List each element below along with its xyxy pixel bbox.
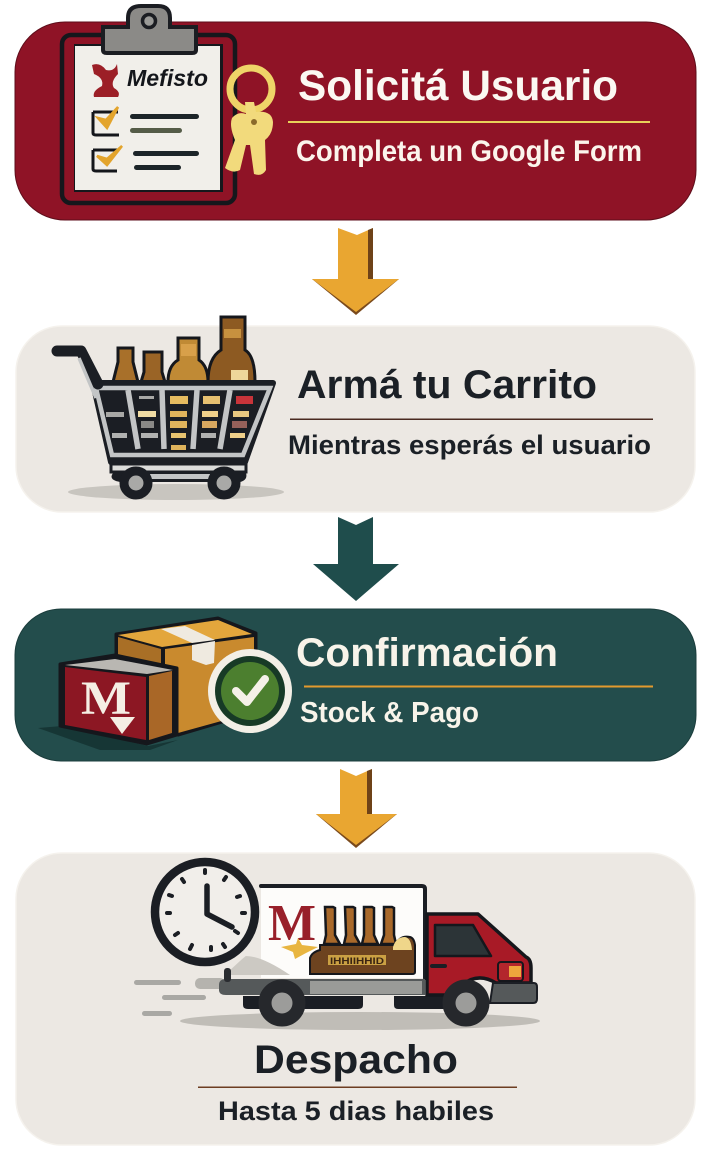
box shadow [38,726,178,750]
road shadow [180,1012,540,1030]
shadow [68,484,284,500]
subheading: Mientras esperás el usuario [288,430,651,460]
icon: keys [225,68,273,175]
icon: clipboard [62,6,235,203]
basket items [106,396,253,450]
arrow 3 [316,769,397,848]
icon: delivery truck [134,886,540,1030]
icon: boxes: M [81,672,131,725]
panel background [16,853,695,1145]
gold box [116,618,256,735]
divider [288,121,650,123]
subheading: Hasta 5 dias habiles [218,1096,494,1126]
chassis [219,979,425,995]
panel background [16,326,695,512]
divider [290,418,653,420]
heading: Confirmación [296,631,558,675]
icon: clipboard: Mefisto [127,65,208,91]
icon: clock [155,862,255,962]
divider [304,686,653,688]
logo M: M [268,895,316,952]
divider [198,1086,517,1088]
speed lines [134,980,181,985]
arrow 2 [313,517,399,601]
arrow 1 [312,228,399,315]
heading: Solicitá Usuario [298,62,618,110]
panel background [15,609,696,761]
panel: solicitá usuario [15,6,696,220]
undercarriage [111,464,246,472]
crate and bottles: IHHIIHHID [330,956,384,967]
panel: confirmación [15,609,696,761]
panel: armá tu carrito [16,317,695,512]
cab [427,914,531,995]
heading: Armá tu Carrito [297,363,597,407]
red box [60,655,177,744]
icon: shopping cart [57,317,284,500]
panel: despacho [16,853,695,1145]
icon: check badge [208,649,292,733]
bottles [113,317,255,382]
wheels [265,986,299,1020]
handle [57,351,98,384]
crate and bottles [310,907,415,974]
cargo box [261,886,423,978]
wheels [124,471,148,495]
basket [93,383,273,462]
subheading: Completa un Google Form [296,135,642,168]
subheading: Stock & Pago [300,697,479,729]
panel background [15,22,696,220]
heading: Despacho [254,1038,458,1082]
icon: boxes [60,618,256,744]
